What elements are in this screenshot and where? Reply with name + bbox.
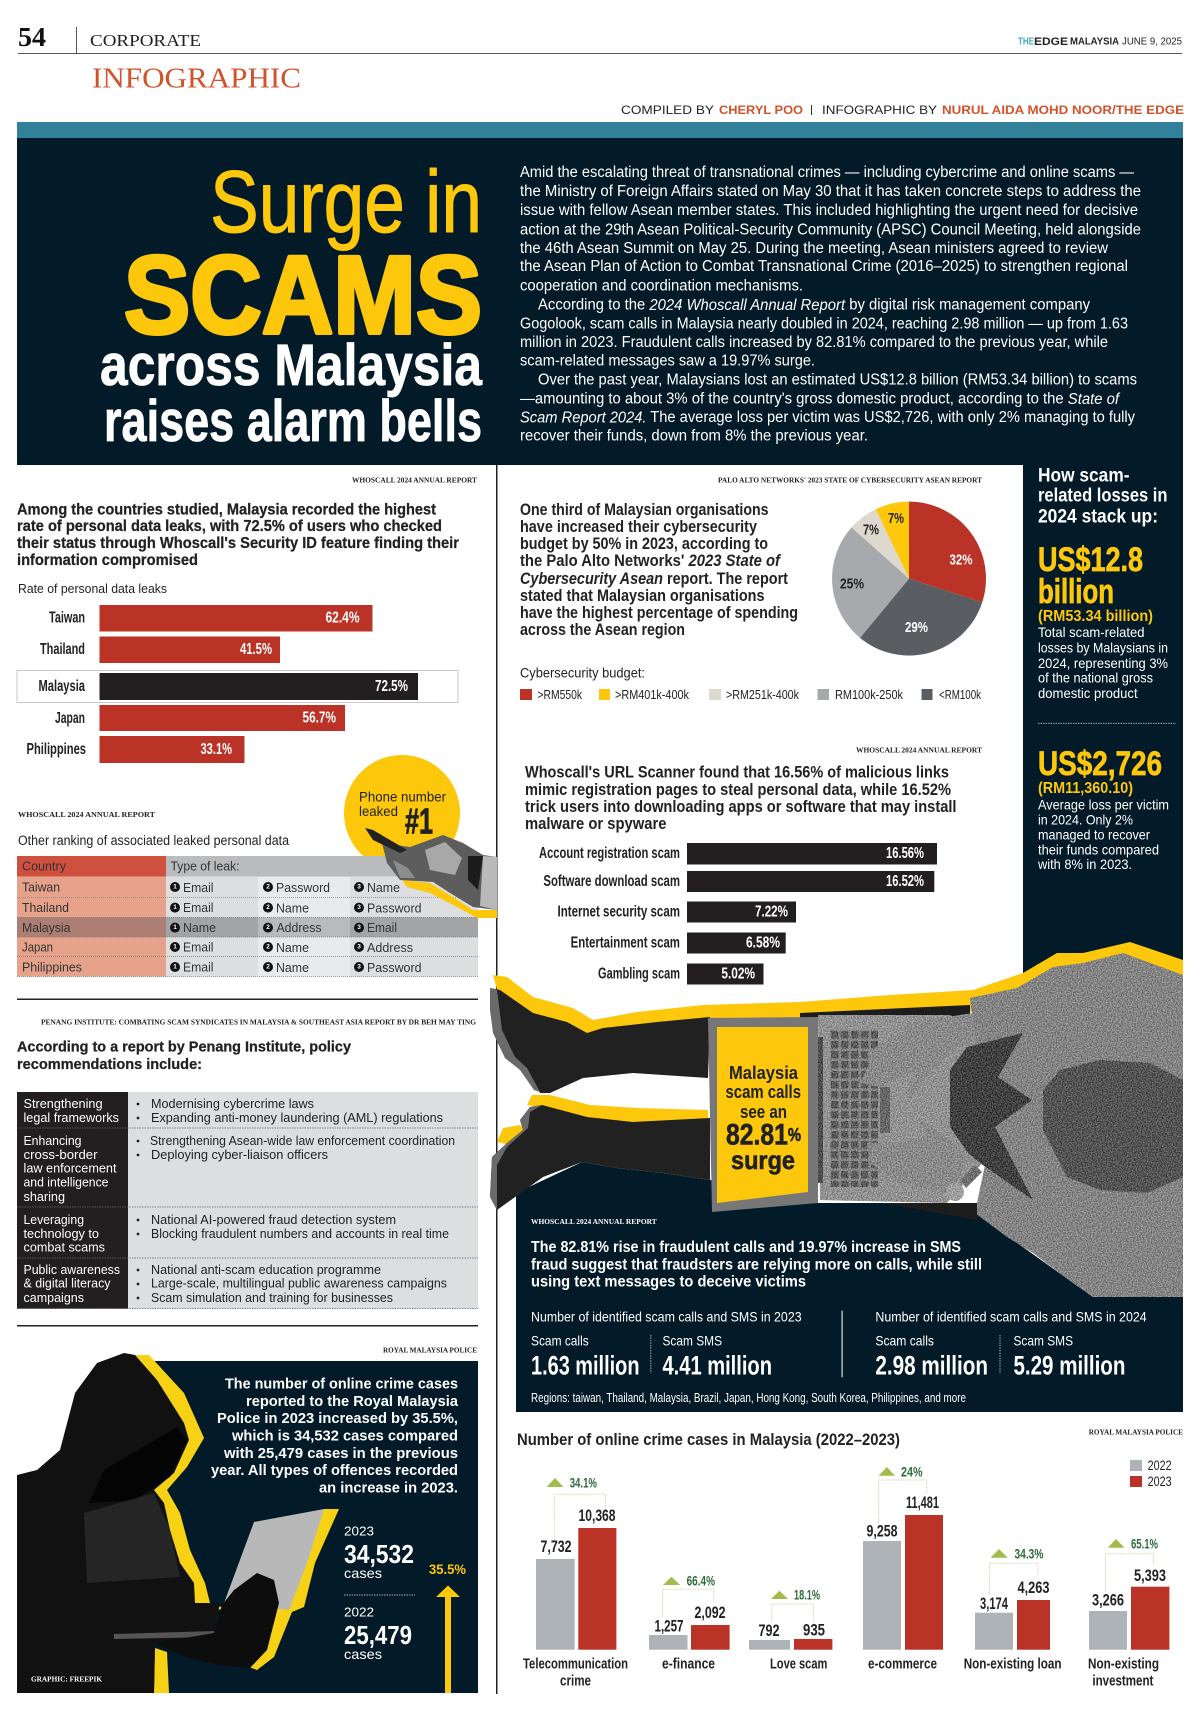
stat: average loss: (RM11,360.10) [1038, 780, 1133, 797]
source: ROYAL MALAYSIA POLICE [1089, 1428, 1183, 1436]
chart: e-finance: 1,257 [654, 1616, 684, 1636]
stat: average loss: managed to recover [1038, 827, 1150, 843]
table: type of leak: Thailand [22, 900, 69, 915]
table: type of leak: 2 [266, 964, 270, 970]
icon: person typing on laptop [490, 942, 1183, 1297]
stats: 2024: 2.98 million [875, 1351, 988, 1381]
table: recommendations: Expanding anti-money laundering (AML) regulations [151, 1110, 443, 1125]
table: recommendations: Public awareness [24, 1262, 120, 1277]
pie chart: 29% [905, 619, 928, 636]
table: recommendations: sharing [24, 1189, 65, 1204]
stat: average loss: in 2024. Only 2% [1038, 812, 1133, 828]
bar chart: scam types [539, 843, 937, 984]
table: type of leak: Email [183, 880, 214, 895]
table: recommendations: Modernising cybercrime laws [151, 1096, 314, 1111]
intro text: recover their funds, down from 8% the previous year. [520, 428, 868, 444]
callout text: reported to the Royal Malaysia [246, 1394, 459, 1410]
chart: non-existing investment: 3,266 [1092, 1590, 1124, 1610]
sidebar heading: related losses in [1038, 486, 1168, 506]
table: recommendations: Blocking fraudulent numbers and accounts in real time [151, 1226, 449, 1241]
credits [621, 103, 1184, 117]
table: recommendations: Enhancing [24, 1133, 82, 1148]
intro text: Gogolook, scam calls in Malaysia nearly doubled in 2024, reaching 2.98 million — up from 1.63 [520, 316, 1128, 332]
chart: non-existing investment: investment [1092, 1672, 1153, 1690]
pie chart [832, 502, 986, 656]
bar chart: leak rates: Malaysia [38, 678, 85, 695]
chart title: Rate of personal data leaks [18, 581, 167, 596]
heading: using text messages to deceive victims [531, 1274, 806, 1290]
callout text: with 25,479 cases in the previous [223, 1446, 458, 1462]
intro text: the Ministry of Foreign Affairs stated on May 30 that it has taken concrete steps to address the [520, 183, 1141, 200]
callout: 82.81% surge on laptop screen [726, 1063, 801, 1175]
chart: telecommunication crime: Telecommunication [523, 1656, 628, 1672]
intro text: —amounting to about 3% of the country's gross domestic product, according to the State of [520, 390, 1121, 408]
table: type of leak: Password [367, 900, 422, 916]
intro text: million in 2023. Fraudulent calls increased by 82.81% compared to the previous year, while [520, 334, 1108, 351]
panel: scam calls and SMS [490, 942, 1183, 1412]
legend: RM100k-250k [835, 687, 903, 702]
table: type of leak: 3 [357, 964, 361, 970]
stat: 2023 cases: cases [344, 1565, 382, 1581]
stats: 2023: 1.63 million [531, 1351, 640, 1381]
sidebar heading: 2024 stack up: [1038, 506, 1158, 528]
source: WHOSCALL 2024 ANNUAL REPORT [18, 810, 155, 819]
heading: Whoscall's URL Scanner found that 16.56% of malicious links [525, 764, 949, 782]
intro text: Scam Report 2024. The average loss per victim was US$2,726, with only 2% managing to fully [520, 409, 1135, 426]
panel: policy recommendations [17, 1018, 478, 1309]
headline: SCAMS [124, 234, 482, 357]
table: type of leak [17, 856, 478, 976]
table: type of leak: Email [367, 920, 397, 935]
heading: their status through Whoscall's Security ID feature finding their [17, 535, 459, 552]
bar chart: leak rates: 56.7% [302, 710, 336, 726]
chart: non-existing investment: 5,393 [1134, 1566, 1166, 1585]
table: type of leak: Name [183, 920, 216, 935]
table: type of leak: 2 [266, 924, 270, 931]
heading: the Palo Alto Networks' 2023 State of [520, 552, 781, 570]
credits: INFOGRAPHIC BY [822, 103, 937, 117]
bar chart: scam types: 16.56% [886, 845, 924, 862]
chart: non-existing investment [1088, 1536, 1169, 1690]
intro text: Amid the escalating threat of transnational crimes — including cybercrime and online scams — [520, 164, 1134, 181]
bar chart: leak rates: Thailand [40, 641, 85, 658]
heading [17, 1040, 351, 1073]
stat: total losses [1038, 541, 1168, 701]
table: type of leak: Name [367, 880, 400, 895]
table: recommendations: and intelligence [24, 1174, 108, 1190]
stat: average loss [1037, 745, 1169, 872]
section name: CORPORATE [90, 31, 201, 50]
table: type of leak: Type of leak: [170, 858, 240, 874]
arrow: upward increase [436, 1586, 460, 1693]
callout text: Police in 2023 increased by 35.5%, [217, 1411, 458, 1427]
panel: data leak rates [17, 476, 477, 763]
chart: telecommunication crime: 7,732 [540, 1537, 572, 1556]
bar chart: scam types: 6.58% [746, 934, 780, 952]
legend: <RM100k [939, 687, 981, 702]
stats: 2024: Scam calls [875, 1333, 934, 1349]
chart title: Number of online crime cases in Malaysia (2022–2023) [517, 1431, 900, 1449]
legend: 2022 [1148, 1458, 1172, 1473]
legend: 2023 [1148, 1474, 1172, 1489]
source: PALO ALTO NETWORKS' 2023 STATE OF CYBERSECURITY ASEAN REPORT [718, 476, 982, 484]
stats: 2023 [531, 1309, 802, 1381]
intro text: According to the 2024 Whoscall Annual Report by digital risk management company [538, 296, 1090, 314]
intro text: Over the past year, Malaysians lost an estimated US$12.8 billion (RM53.34 billion) to scams [538, 372, 1137, 388]
publication and date: EDGE [1034, 36, 1068, 48]
page number: 54 [18, 22, 46, 52]
panel: malicious links [525, 746, 982, 984]
panel: leaked data ranking [17, 810, 478, 976]
heading: Cybersecurity Asean report. The report [520, 570, 788, 588]
table: type of leak: Email [183, 960, 214, 974]
table: recommendations: Deploying cyber-liaison officers [151, 1147, 328, 1162]
table title: Other ranking of associated leaked personal data [18, 833, 289, 848]
table: recommendations: Strengthening Asean-wide law enforcement coordination [150, 1133, 455, 1148]
callout: 82.81% surge on laptop screen: surge [731, 1145, 795, 1175]
table: type of leak: 2 [266, 904, 270, 911]
callout: phone number leaked: Phone number [359, 788, 446, 804]
credits: NURUL AIDA MOHD NOOR/THE EDGE [942, 103, 1184, 117]
table: type of leak: 2 [266, 884, 270, 890]
heading: stated that Malaysian organisations [520, 587, 764, 605]
stats: 2023: Scam calls [531, 1333, 589, 1349]
chart: non-existing investment: 65.1% [1131, 1536, 1158, 1552]
heading: trick users into downloading apps or software that may install [525, 798, 956, 816]
stat: total losses: US$12.8 [1038, 541, 1143, 579]
bar chart: leak rates: 72.5% [375, 678, 408, 695]
sidebar heading: How scam- [1038, 466, 1130, 486]
stat: average loss: Average loss per victim [1038, 796, 1169, 812]
stat: total losses: (RM53.34 billion) [1038, 608, 1153, 625]
table: type of leak: Country [22, 858, 66, 874]
callout: 82.81% surge on laptop screen: Malaysia [729, 1063, 799, 1083]
heading: One third of Malaysian organisations [520, 501, 768, 519]
image credit: GRAPHIC: FREEPIK [31, 1674, 102, 1684]
stats: 2024: Scam SMS [1014, 1333, 1073, 1349]
heading [531, 1239, 982, 1290]
stat: average loss: their funds compared [1038, 842, 1159, 858]
column divider [496, 465, 498, 1694]
stat: average loss: with 8% in 2023. [1037, 856, 1132, 872]
table: type of leak: Name [276, 900, 309, 916]
stat: total losses: 2024, representing 3% [1038, 655, 1168, 671]
heading: mimic registration pages to steal personal data, while 16.52% [525, 781, 951, 799]
torso and arms [817, 953, 1183, 1297]
panel: cybersecurity budget [520, 476, 986, 702]
chart: e-commerce [863, 1464, 943, 1672]
stat: average loss: US$2,726 [1038, 745, 1162, 783]
heading: budget by 50% in 2023, according to [520, 535, 768, 553]
table: recommendations: & digital literacy [24, 1276, 111, 1290]
table: type of leak: 3 [357, 904, 361, 911]
table: recommendations: Large-scale, multilingual public awareness campaigns [151, 1276, 447, 1290]
table: type of leak: 3 [357, 924, 361, 931]
stats: 2023: Number of identified scam calls and SMS in 2023 [531, 1309, 802, 1325]
stats: 2023: 4.41 million [662, 1351, 772, 1381]
table: recommendations: Scam simulation and training for businesses [151, 1290, 393, 1305]
bar chart: leak rates: 41.5% [240, 641, 272, 658]
stat: total losses: of the national gross [1038, 670, 1153, 686]
headline [100, 152, 483, 454]
bar chart: scam types: 16.52% [886, 873, 924, 890]
source: ROYAL MALAYSIA POLICE [383, 1346, 477, 1354]
bar chart: leak rates: 33.1% [200, 741, 232, 758]
stat: total losses: Total scam-related [1038, 624, 1144, 640]
heading: have increased their cybersecurity [520, 518, 758, 536]
table: recommendations: National anti-scam education programme [151, 1262, 381, 1277]
table: type of leak: 1 [173, 944, 177, 950]
headline: across Malaysia [100, 333, 483, 398]
callout text [211, 1377, 459, 1497]
icon: hooded figure with laptop [17, 1353, 339, 1693]
bar chart: scam types: Account registration scam [539, 845, 680, 862]
upper leg [490, 988, 710, 1093]
growth percentage: 35.5% [429, 1561, 467, 1577]
table: recommendations: Leveraging [24, 1212, 84, 1227]
table: recommendations [17, 1092, 478, 1309]
table: type of leak: Address [367, 940, 413, 955]
chart: telecommunication crime: crime [560, 1672, 591, 1690]
heading: rate of personal data leaks, with 72.5% of users who checked [17, 518, 442, 535]
chart: love scam: 792 [758, 1621, 780, 1640]
stat: 2023 cases: 2023 [344, 1524, 374, 1538]
table: recommendations: campaigns [24, 1290, 84, 1305]
table: type of leak: Email [183, 900, 214, 915]
legend: Cybersecurity budget: [520, 664, 645, 680]
bar chart: scam types: Entertainment scam [571, 934, 680, 952]
laptop screen [708, 1017, 818, 1212]
callout text: The number of online crime cases [225, 1377, 458, 1393]
heading [520, 501, 798, 639]
source: PENANG INSTITUTE: COMBATING SCAM SYNDICATES IN MALAYSIA & SOUTHEAST ASIA REPORT BY DR BEH MAY TING [41, 1018, 476, 1026]
credits: CHERYL POO [719, 103, 803, 117]
bar chart: leak rates: 62.4% [326, 610, 360, 626]
bar chart: leak rates: Taiwan [49, 610, 85, 626]
chart: non-existing loan: 3,174 [980, 1594, 1008, 1613]
icon: yellow phone number badge [344, 755, 460, 871]
stats: 2024 [875, 1309, 1147, 1381]
stats: 2023: Scam SMS [662, 1333, 722, 1349]
chart: e-finance: 2,092 [694, 1603, 726, 1622]
chart: love scam: Love scam [770, 1656, 827, 1672]
legend [520, 664, 981, 702]
stat: 2022 cases: 25,479 [344, 1620, 412, 1650]
stat: total losses: domestic product [1038, 685, 1138, 701]
legend: >RM401k-400k [615, 687, 689, 702]
stat: 2022 cases: 2022 [344, 1604, 374, 1620]
chart: non-existing loan: Non-existing loan [964, 1656, 1062, 1672]
heading: fraud suggest that fraudsters are relying more on calls, while still [531, 1256, 982, 1274]
intro text: cooperation and coordination mechanisms. [520, 278, 803, 294]
chart: telecommunication crime [523, 1475, 628, 1690]
callout: 82.81% surge on laptop screen: see an [740, 1102, 787, 1122]
table: type of leak: Name [276, 940, 309, 955]
lower leg [490, 1105, 710, 1210]
publication and date: MALAYSIA [1070, 36, 1119, 48]
legend: >RM251k-400k [726, 687, 799, 702]
pie chart: 7% [888, 510, 904, 527]
bar chart: scam types: Gambling scam [598, 966, 680, 982]
stat: 2023 cases [344, 1524, 414, 1581]
table: recommendations: law enforcement [24, 1160, 117, 1176]
chart: love scam [749, 1587, 832, 1672]
legend: >RM550k [538, 687, 582, 702]
table: type of leak: 1 [173, 924, 177, 931]
icon: hand holding phone [365, 828, 497, 918]
chart: non-existing loan: 34.3% [1014, 1546, 1044, 1562]
intro text: scam-related messages saw a 19.97% surge. [520, 352, 815, 370]
table: type of leak: 1 [173, 964, 177, 970]
publication and date [1018, 36, 1182, 48]
yellow torn edge [493, 942, 1183, 1040]
table: type of leak: Japan [22, 940, 53, 954]
chart: e-finance: e-finance [662, 1656, 715, 1672]
callout text: an increase in 2023. [319, 1481, 458, 1497]
callout: phone number leaked: leaked [359, 803, 398, 819]
chart: e-commerce: 9,258 [866, 1522, 898, 1540]
regions note: Regions: taiwan, Thailand, Malaysia, Brazil, Japan, Hong Kong, South Korea, Philippines, and more [531, 1390, 966, 1405]
chart: e-commerce: 11,481 [906, 1493, 939, 1512]
intro text: the 46th Asean Summit on May 25. During the meeting, Asean ministers agreed to review [520, 240, 1109, 257]
heading: malware or spyware [525, 815, 666, 833]
table: type of leak: Password [367, 960, 422, 975]
chart: telecommunication crime: 34.1% [570, 1475, 597, 1491]
panel: online crime cases [17, 1346, 478, 1693]
intro text: action at the 29th Asean Political-Security Community (APSC) Council Meeting, held alongside [520, 222, 1141, 238]
section label: INFOGRAPHIC [92, 62, 301, 94]
stat: total losses: losses by Malaysians in [1038, 640, 1168, 656]
table: recommendations: technology to [24, 1226, 99, 1241]
table: type of leak: Taiwan [22, 880, 60, 894]
callout text: year. All types of offences recorded [211, 1463, 458, 1479]
table: type of leak: Email [183, 940, 214, 954]
intro text [520, 164, 1141, 444]
credits: COMPILED BY [621, 103, 714, 117]
heading: Among the countries studied, Malaysia recorded the highest [17, 502, 436, 518]
table: type of leak: 3 [357, 944, 361, 950]
table: recommendations: cross-border [24, 1147, 98, 1162]
stat: 2022 cases [344, 1604, 412, 1662]
table: type of leak: Philippines [22, 960, 82, 974]
table: type of leak: Address [276, 920, 322, 935]
chart: non-existing loan [964, 1546, 1062, 1672]
panel: online crime cases chart [517, 1428, 1183, 1690]
hero panel [17, 138, 1183, 465]
chart: e-commerce: 24% [901, 1464, 923, 1480]
heading: According to a report by Penang Institute, policy [17, 1040, 351, 1056]
bar chart: scam types: 5.02% [721, 966, 755, 982]
callout: phone number leaked [359, 788, 446, 842]
chart: love scam: 18.1% [794, 1587, 820, 1603]
table: type of leak: 2 [266, 944, 270, 950]
legend [1130, 1458, 1172, 1489]
stats: 2024: 5.29 million [1014, 1351, 1125, 1381]
source: WHOSCALL 2024 ANNUAL REPORT [856, 746, 982, 754]
table: type of leak: Password [276, 880, 330, 895]
intro text: the Asean Plan of Action to Combat Transnational Crime (2016–2025) to strengthen regional [520, 258, 1128, 275]
heading: The 82.81% rise in fraudulent calls and 19.97% increase in SMS [531, 1239, 961, 1256]
masthead [18, 22, 1184, 117]
pie chart: 32% [950, 552, 972, 568]
heading: recommendations include: [17, 1057, 202, 1073]
table: recommendations: Strengthening [24, 1096, 102, 1111]
stat: 2023 cases: 34,532 [344, 1539, 414, 1569]
headline: raises alarm bells [104, 389, 482, 454]
teal band [17, 122, 1183, 138]
table: type of leak: Malaysia [22, 920, 71, 935]
table: recommendations: National AI-powered fraud detection system [151, 1212, 396, 1227]
callout text: which is 34,532 cases compared [231, 1428, 458, 1444]
source: WHOSCALL 2024 ANNUAL REPORT [531, 1217, 657, 1226]
heading [17, 502, 459, 569]
heading [525, 764, 956, 833]
stat: total losses: billion [1038, 573, 1114, 611]
callout: phone number leaked: #1 [405, 800, 433, 842]
bar chart: scam types: 7.22% [755, 904, 788, 920]
chart: love scam: 935 [803, 1620, 825, 1640]
chart: telecommunication crime: 10,368 [578, 1506, 616, 1525]
bar chart: leak rates: Philippines [26, 741, 86, 758]
intro text: issue with fellow Asean member states. This included highlighting the urgent need for decisive [520, 202, 1138, 219]
callout: 82.81% surge on laptop screen: 82.81% [726, 1118, 801, 1152]
source: WHOSCALL 2024 ANNUAL REPORT [352, 476, 477, 484]
pie chart: 25% [840, 576, 864, 592]
heading: across the Asean region [520, 621, 685, 639]
bar chart: scam types: Internet security scam [558, 904, 680, 920]
sidebar heading [1038, 466, 1168, 528]
callout: 82.81% surge on laptop screen: scam calls [726, 1082, 801, 1102]
chart: non-existing investment: Non-existing [1088, 1656, 1159, 1672]
chart: e-finance [649, 1573, 730, 1672]
table: type of leak: 3 [357, 884, 361, 890]
publication and date: THE [1018, 36, 1034, 48]
table: type of leak: 1 [173, 904, 177, 911]
heading: information compromised [17, 552, 198, 569]
table: recommendations: combat scams [24, 1240, 105, 1254]
heading: have the highest percentage of spending [520, 604, 798, 622]
pie chart: 7% [863, 522, 879, 538]
headline: Surge in [210, 152, 482, 251]
chart: non-existing loan: 4,263 [1018, 1578, 1050, 1597]
publication and date: JUNE 9, 2025 [1122, 36, 1182, 48]
bar chart: scam types: Software download scam [543, 873, 680, 890]
stats: 2024: Number of identified scam calls and SMS in 2024 [875, 1309, 1147, 1325]
stat: 2022 cases: cases [344, 1646, 382, 1662]
table: recommendations: legal frameworks [24, 1110, 119, 1125]
bar chart: leak rates: Japan [55, 710, 85, 727]
chart: e-finance: 66.4% [687, 1573, 715, 1589]
table: type of leak: 1 [173, 884, 177, 890]
table: type of leak: Name [276, 960, 309, 975]
bar chart: leak rates [17, 605, 458, 763]
chart: e-commerce: e-commerce [868, 1656, 937, 1672]
panel: losses sidebar [1023, 465, 1183, 1005]
